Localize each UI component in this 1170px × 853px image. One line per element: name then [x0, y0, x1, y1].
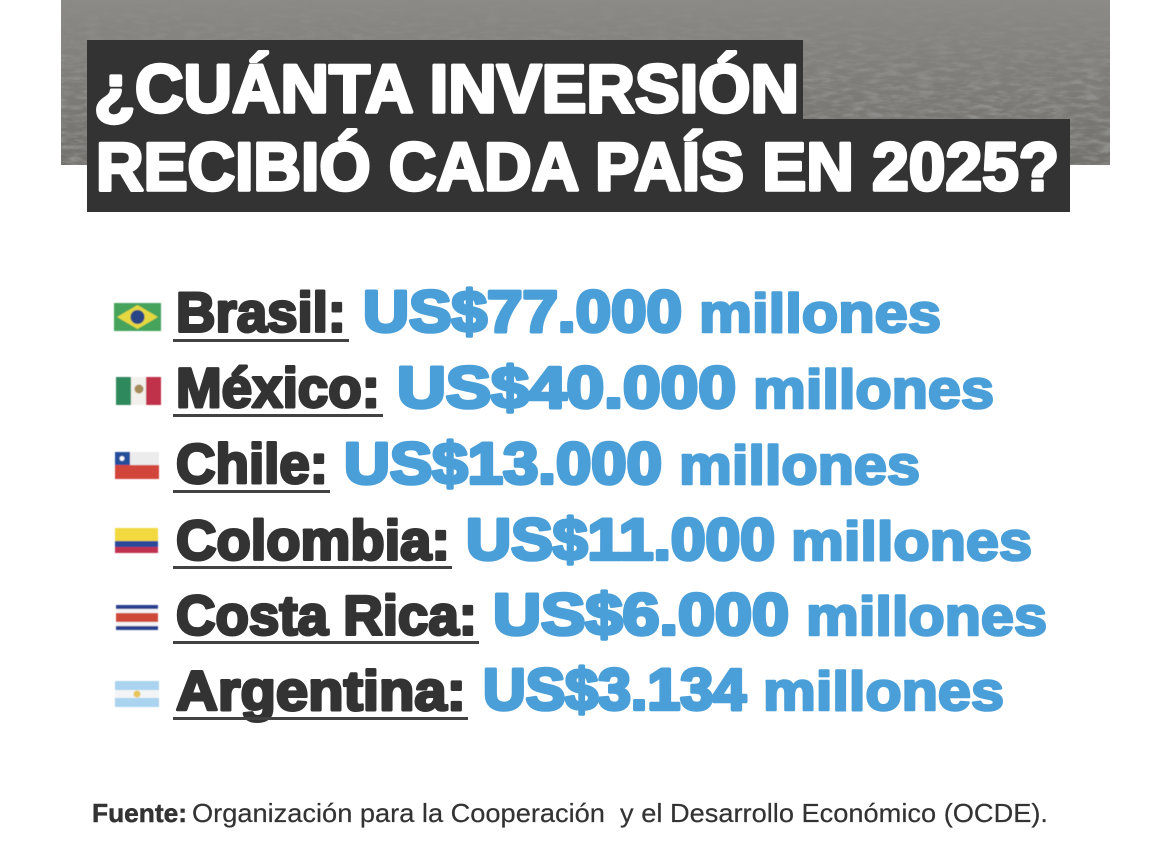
icon: flag of Costa Rica	[116, 605, 158, 630]
source note: Organización para la Cooperación y el Desarrollo Económico (OCDE).	[192, 798, 1048, 828]
unit: Chile: millones	[679, 434, 920, 496]
row: Chile	[115, 432, 920, 496]
icon: flag of Brazil	[114, 303, 161, 331]
row: Brasil	[114, 280, 941, 344]
icon: flag of Argentina	[115, 681, 159, 707]
label: Costa Rica: Costa Rica:	[176, 584, 477, 646]
row: Colombia	[115, 508, 1032, 572]
value: Costa Rica: US$6.000	[493, 582, 789, 648]
value: México: US$40.000	[397, 356, 736, 420]
unit: Argentina: millones	[763, 660, 1004, 722]
value: Argentina: US$3.134	[483, 658, 746, 722]
icon: flag of Mexico	[116, 377, 161, 405]
label: México: México:	[176, 356, 380, 419]
unit: Brasil: millones	[699, 282, 941, 344]
label: Brasil: Brasil:	[176, 280, 346, 344]
row: Costa Rica	[116, 582, 1047, 648]
label: Argentina: Argentina:	[176, 659, 466, 722]
icon: flag of Colombia	[115, 528, 158, 553]
icon: flag of Chile	[115, 452, 159, 479]
label: Chile: Chile:	[176, 432, 328, 495]
title	[87, 40, 1070, 212]
background photo: grey ground texture	[61, 0, 1110, 165]
value: Brasil: US$77.000	[363, 280, 682, 344]
label: Colombia: Colombia:	[176, 508, 450, 572]
row: México	[116, 356, 994, 420]
unit: México: millones	[753, 358, 994, 420]
title: ¿CUÁNTA INVERSIÓN	[94, 51, 799, 127]
title: RECIBIÓ CADA PAÍS EN 2025?	[96, 129, 1059, 205]
unit: Colombia: millones	[791, 510, 1032, 572]
row: Argentina	[115, 658, 1004, 722]
value: Chile: US$13.000	[344, 432, 662, 496]
source note: Fuente:	[92, 798, 187, 828]
value: Colombia: US$11.000	[466, 508, 775, 572]
unit: Costa Rica: millones	[806, 585, 1047, 647]
